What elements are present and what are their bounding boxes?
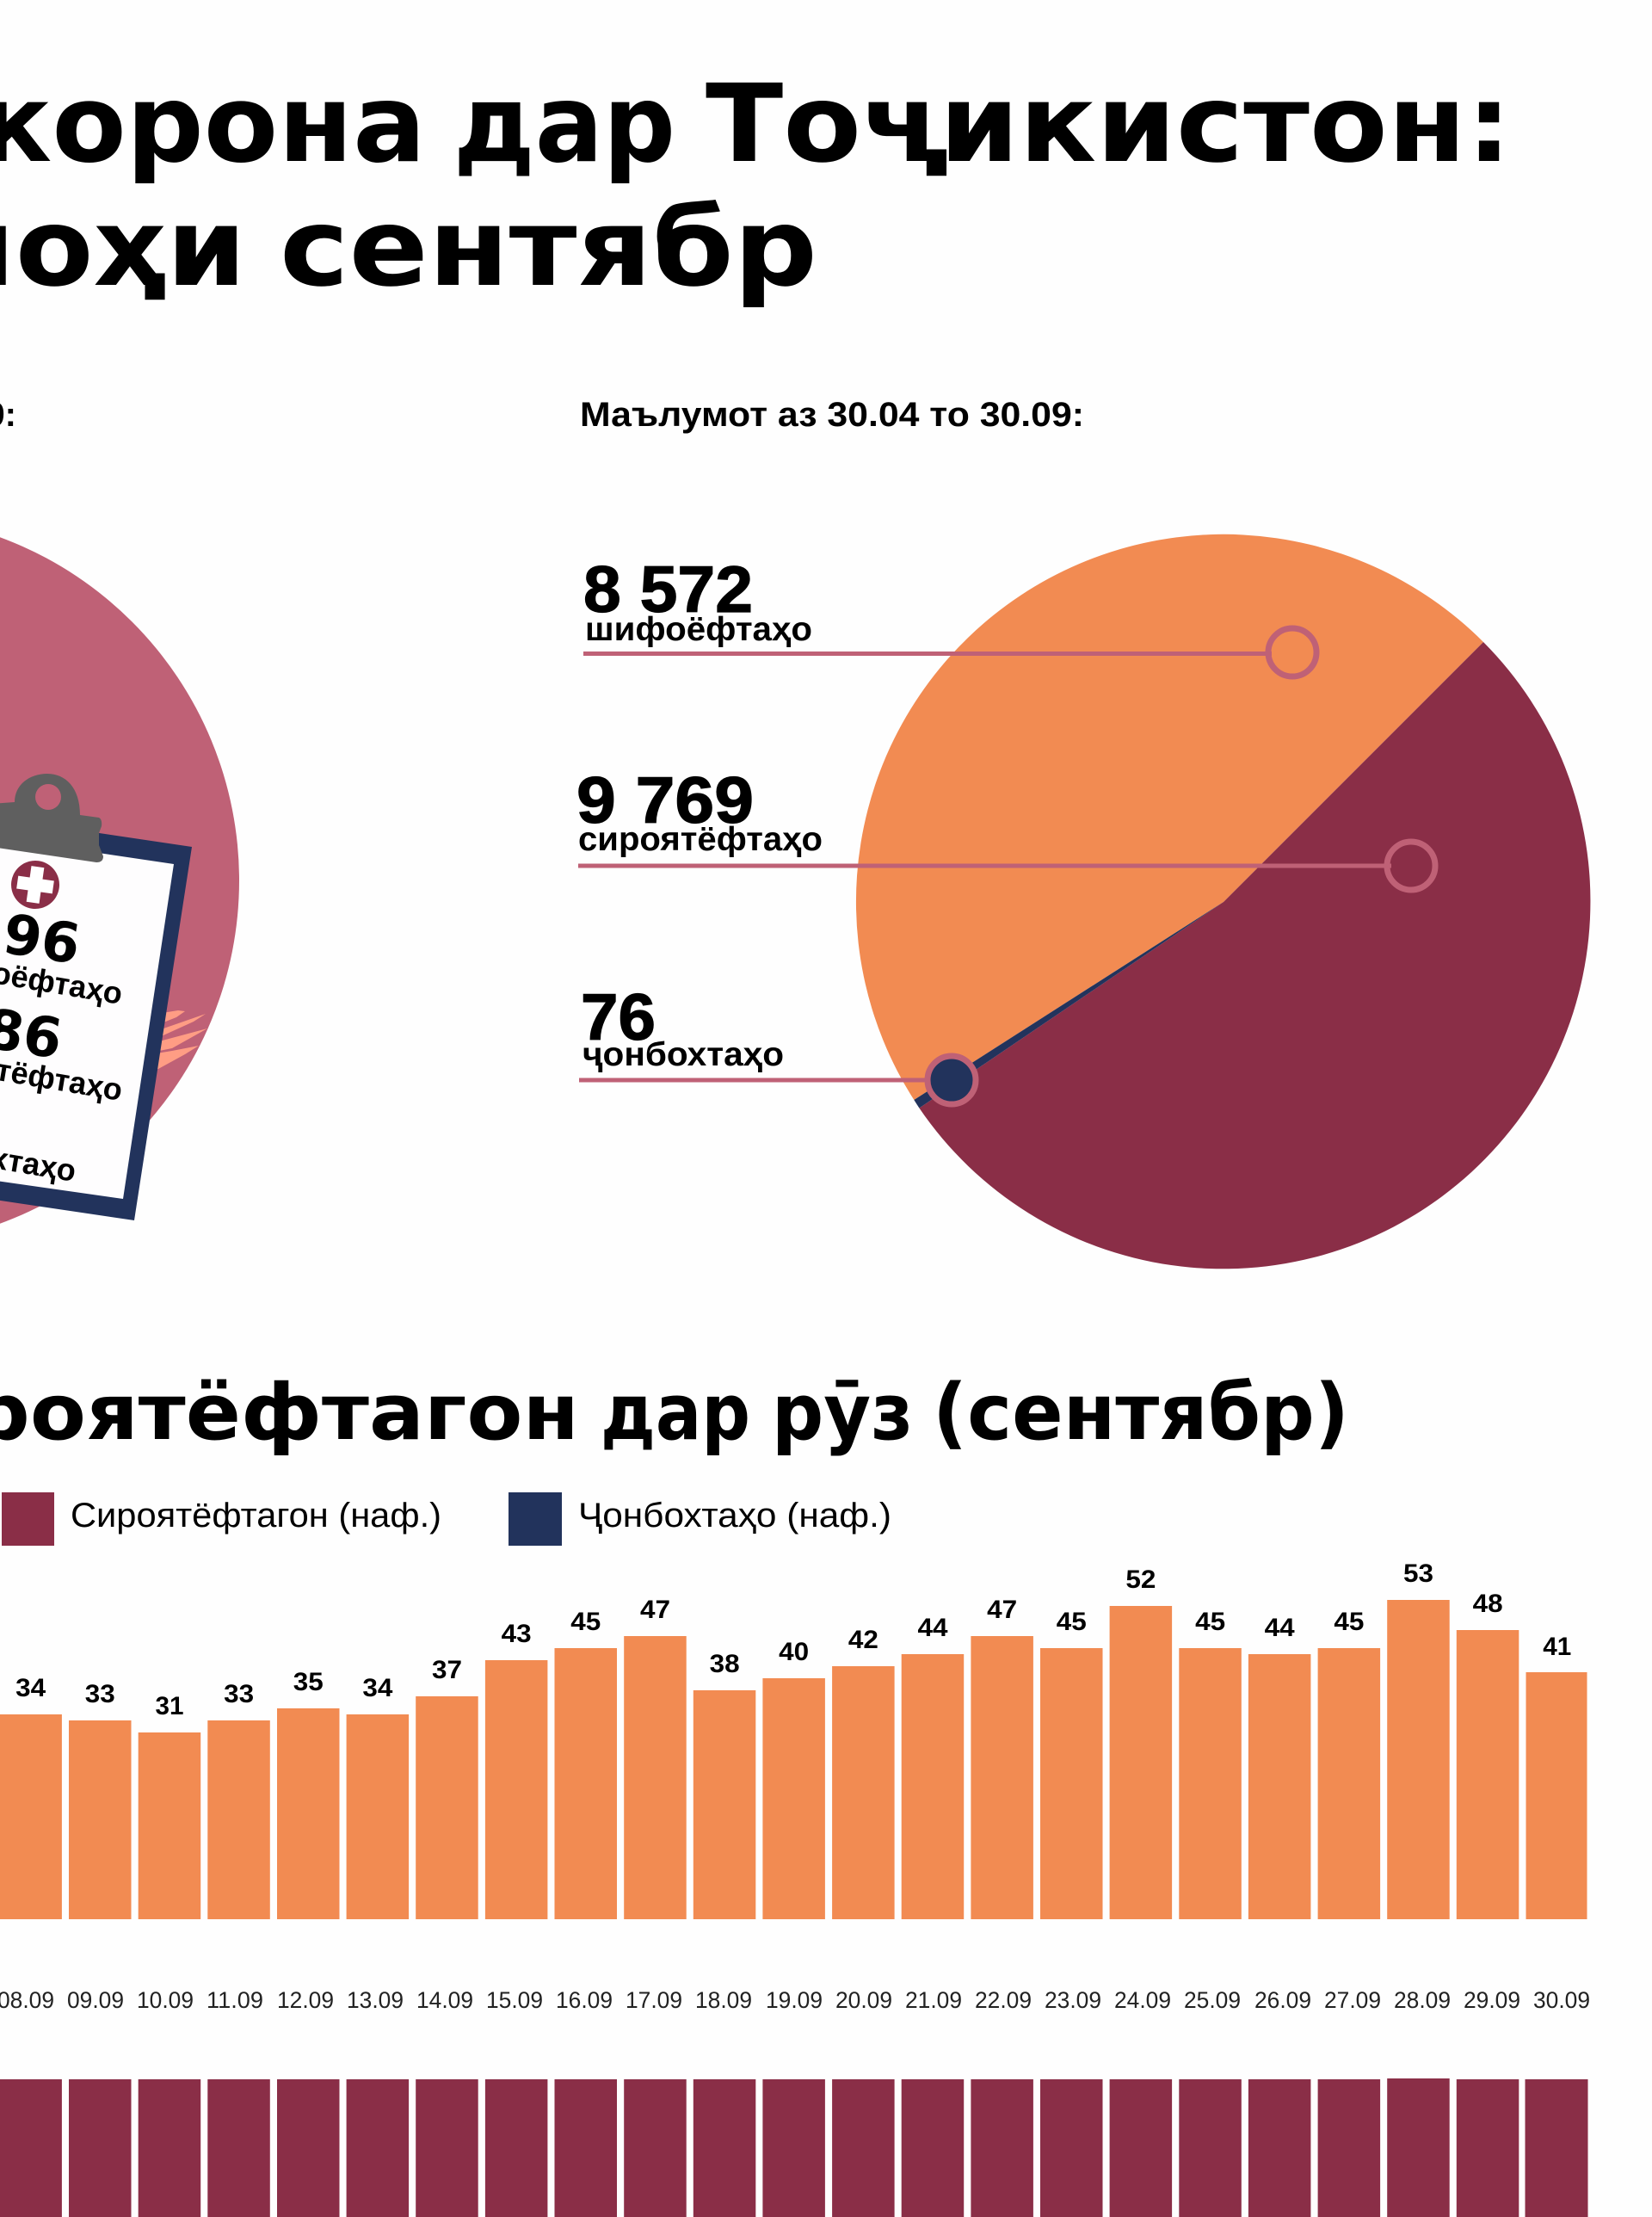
bar value labels: 44 [917, 1614, 948, 1642]
clipboard board [0, 813, 192, 1220]
bar value labels: 44 [1265, 1614, 1295, 1642]
date axis labels: 19.09 [766, 1987, 823, 2013]
pink background circle [0, 515, 239, 1246]
date axis labels: 13.09 [347, 1987, 404, 2013]
bar value labels [15, 1559, 1571, 1720]
date axis labels: 10.09 [137, 1987, 194, 2013]
chart heading [0, 1368, 1349, 1458]
date axis labels: 26.09 [1254, 1987, 1311, 2013]
date axis labels: 12.09 [277, 1987, 334, 2013]
icon: medical cross [8, 857, 63, 912]
chart heading: (сентябр) [933, 1368, 1349, 1458]
callout: deaths: ҷонбохтаҳо [583, 1036, 784, 1073]
bar value labels: 47 [987, 1596, 1017, 1624]
title: Тоҷикистон: [706, 62, 1512, 187]
callout: recovered: шифоёфтаҳо [585, 611, 812, 648]
bar chart: lower maroon bars [0, 2078, 1587, 2217]
legend label: deaths: Ҷонбохтаҳо (наф.) [578, 1497, 891, 1535]
callout: recovered: 8 572 [583, 553, 753, 627]
date axis labels: 17.09 [626, 1987, 682, 2013]
bar value labels: 40 [779, 1638, 809, 1666]
callout: deaths: 76 [581, 981, 656, 1054]
date axis labels: 25.09 [1184, 1987, 1241, 2013]
icon: peach feather strokes [146, 1010, 207, 1072]
bar value labels: 45 [570, 1608, 601, 1636]
bar value labels: 45 [1057, 1608, 1087, 1636]
date axis labels [0, 1987, 1590, 2013]
date axis labels: 28.09 [1394, 1987, 1451, 2013]
date axis labels: 27.09 [1324, 1987, 1381, 2013]
title [0, 62, 1512, 311]
bar value labels: 33 [85, 1680, 115, 1708]
date axis labels: 23.09 [1045, 1987, 1101, 2013]
bar value labels: 45 [1195, 1608, 1225, 1636]
bar value labels: 42 [848, 1626, 878, 1654]
bar value labels: 43 [502, 1620, 532, 1648]
date axis labels: 14.09 [416, 1987, 473, 2013]
chart heading: рӯз [772, 1368, 913, 1458]
bar value labels: 34 [15, 1674, 46, 1702]
stat: recovered: 96 [0, 903, 84, 978]
bar value labels: 34 [362, 1674, 393, 1702]
pie slice: infected [919, 642, 1590, 1269]
title: дар [453, 62, 675, 187]
stat: recovered [0, 903, 125, 1011]
date axis labels: 20.09 [835, 1987, 892, 2013]
date axis labels: 29.09 [1464, 1987, 1520, 2013]
bar value labels: 48 [1473, 1590, 1503, 1618]
callout: infected: 9 769 [576, 764, 754, 837]
bar value labels: 33 [224, 1680, 254, 1708]
legend swatch: infected [2, 1492, 54, 1546]
bar value labels: 37 [432, 1656, 462, 1684]
date axis labels: 18.09 [695, 1987, 752, 2013]
bar value labels: 53 [1403, 1559, 1433, 1588]
chart heading: дар [601, 1368, 750, 1458]
bar chart: infected per day [0, 1600, 1587, 1919]
pie slice: deaths [914, 902, 1224, 1108]
clipboard paper [0, 833, 174, 1199]
panel: clipboard illustration [0, 515, 239, 1246]
pie slice: recovered [856, 534, 1483, 1100]
date axis labels: 09.09 [67, 1987, 124, 2013]
callout: deaths [579, 981, 976, 1104]
clip hole [35, 784, 61, 810]
callout: recovered [583, 553, 1316, 676]
bar value labels: 47 [640, 1596, 670, 1624]
title: сентябр [280, 186, 817, 311]
date axis labels: 15.09 [486, 1987, 543, 2013]
bar value labels: 41 [1543, 1633, 1571, 1661]
date axis labels: 11.09 [206, 1987, 263, 2013]
date axis labels: 24.09 [1114, 1987, 1171, 2013]
bar value labels: 45 [1334, 1608, 1364, 1636]
date axis labels: 16.09 [556, 1987, 613, 2013]
legend [2, 1492, 891, 1546]
right panel date heading: Маълумот аз 30.04 то 30.09: [580, 396, 1084, 434]
bar value labels: 52 [1125, 1565, 1156, 1594]
bar value labels: 35 [293, 1668, 324, 1696]
bar value labels: 31 [155, 1692, 184, 1720]
clipboard clip [0, 774, 103, 862]
callout: infected: сироятёфтаҳо [578, 821, 823, 858]
legend swatch: deaths [509, 1492, 562, 1546]
panel: pie chart [576, 534, 1590, 1269]
stat: infected [0, 997, 125, 1108]
date axis labels: 21.09 [905, 1987, 962, 2013]
date axis labels: 30.09 [1533, 1987, 1590, 2013]
legend label: infected: Сироятёфтагон (наф.) [71, 1497, 441, 1535]
bar value labels: 38 [710, 1650, 740, 1678]
date axis labels: 22.09 [975, 1987, 1032, 2013]
callout: infected [576, 764, 1435, 890]
